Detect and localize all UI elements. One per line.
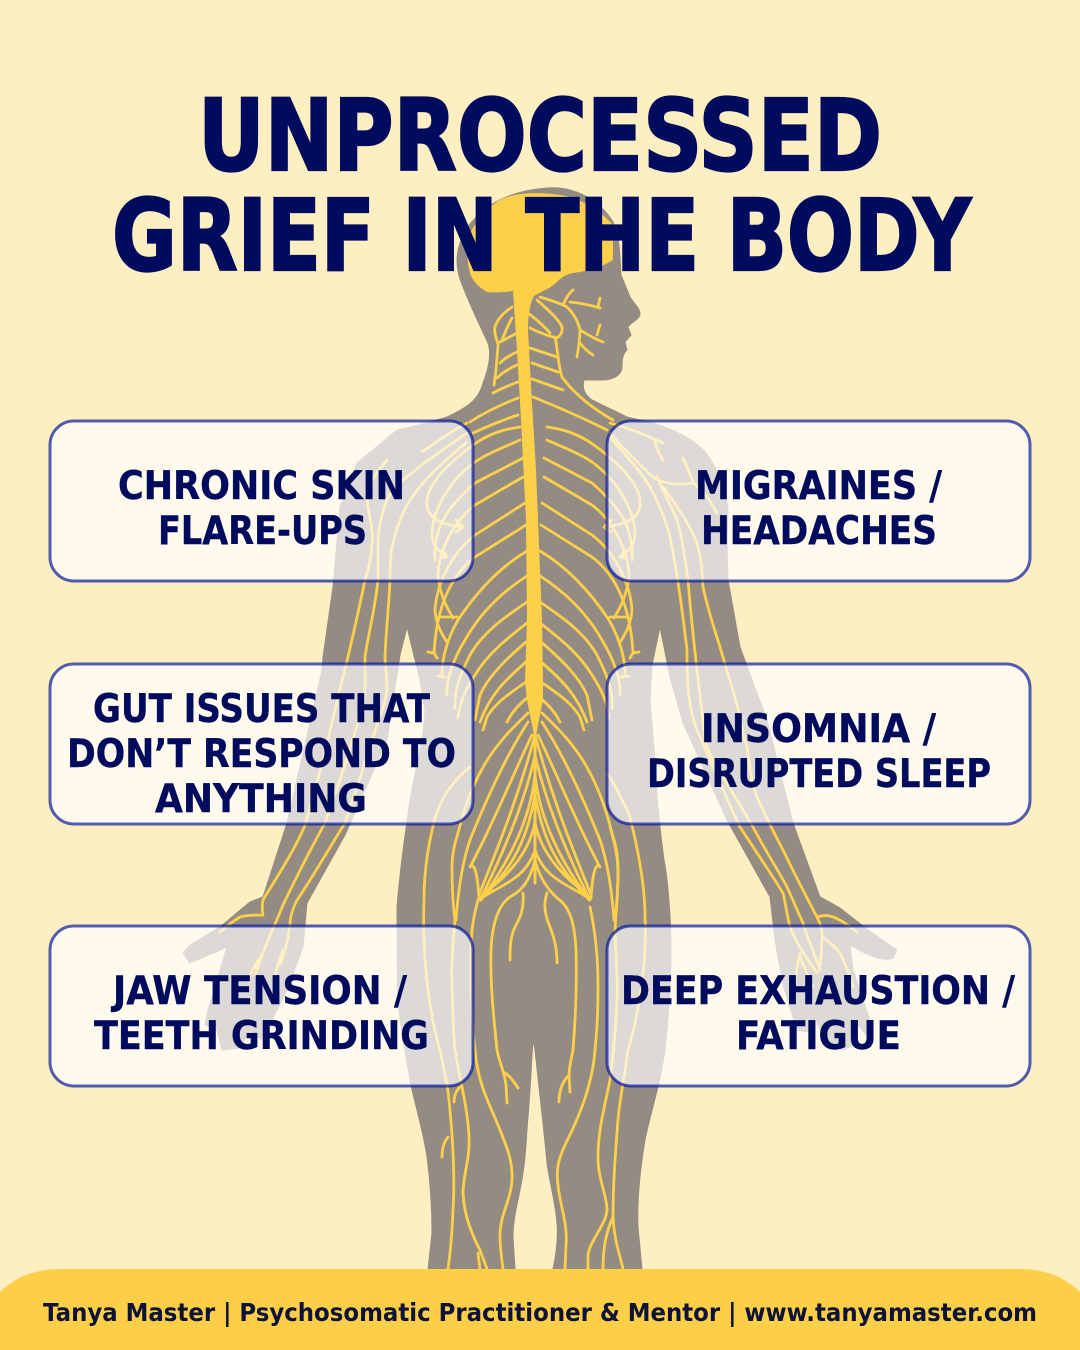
leg nerves bbox=[424, 767, 645, 1269]
body silhouette bbox=[183, 188, 897, 1269]
label: FLARE-UPS bbox=[158, 509, 367, 554]
panel: deep exhaustion / fatigue bbox=[607, 926, 1030, 1086]
label: JAW TENSION / bbox=[110, 969, 408, 1014]
footer band bbox=[0, 1269, 1080, 1350]
label: MIGRAINES / bbox=[695, 464, 943, 509]
right arm nerves bbox=[610, 423, 857, 987]
label bbox=[621, 969, 1016, 1059]
label: HEADACHES bbox=[701, 509, 937, 554]
lumbosacral nerve fan: left bbox=[452, 713, 535, 920]
label: FATIGUE bbox=[736, 1014, 901, 1059]
label bbox=[118, 464, 405, 554]
brain and spinal cord bbox=[467, 193, 613, 740]
rib nerves: left side bbox=[427, 427, 527, 730]
panel: jaw tension / teeth grinding bbox=[50, 926, 473, 1086]
label: DON’T RESPOND TO bbox=[67, 732, 456, 777]
label bbox=[94, 969, 429, 1059]
panel: migraines / headaches bbox=[607, 421, 1030, 581]
label: DISRUPTED SLEEP bbox=[647, 752, 991, 797]
label: CHRONIC SKIN bbox=[118, 464, 405, 509]
left arm nerves bbox=[220, 423, 467, 975]
label: TEETH GRINDING bbox=[94, 1014, 429, 1059]
rib nerves: right side bbox=[540, 427, 640, 730]
title: UNPROCESSED bbox=[198, 79, 882, 194]
label: GUT ISSUES THAT bbox=[93, 687, 430, 732]
panel: insomnia / disrupted sleep bbox=[607, 664, 1030, 824]
panel: gut issues bbox=[50, 664, 473, 824]
label bbox=[67, 687, 456, 822]
label: DEEP EXHAUSTION / bbox=[621, 969, 1016, 1014]
neck and face nerves bbox=[470, 290, 613, 433]
label bbox=[647, 707, 991, 797]
lumbosacral nerve fan: right bbox=[535, 713, 618, 920]
label: INSOMNIA / bbox=[701, 707, 937, 752]
label bbox=[695, 464, 943, 554]
title bbox=[112, 79, 972, 294]
panel: chronic skin flare-ups bbox=[50, 421, 473, 581]
label: ANYTHING bbox=[155, 777, 367, 822]
illustration: human body with nervous system bbox=[183, 188, 897, 1269]
